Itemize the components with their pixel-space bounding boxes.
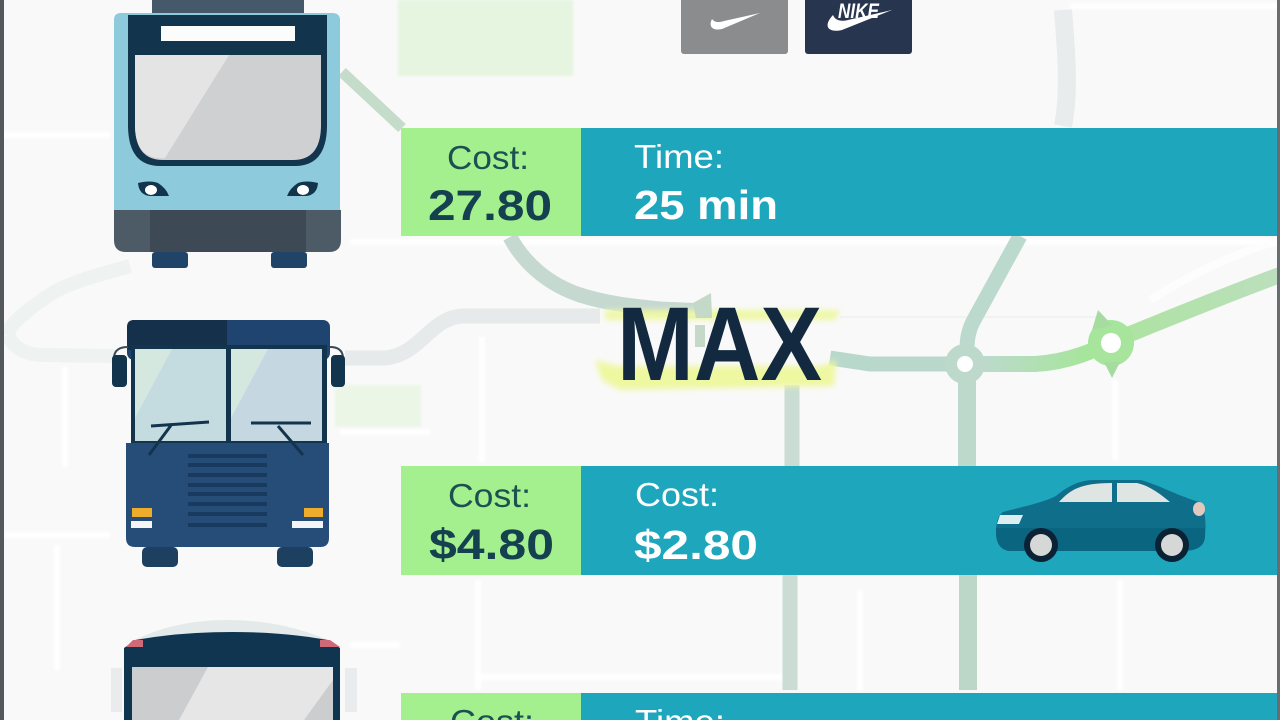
logo tile: navy swoosh: NIKE: [838, 0, 880, 23]
second cost panel: Cost:: [635, 476, 719, 513]
cost panel: $4.80: [429, 521, 554, 569]
right edge border: [1277, 0, 1280, 720]
logo tile: navy swoosh: [805, 0, 912, 54]
time panel: Time:: [634, 138, 724, 175]
icon: navy bus: [112, 320, 345, 567]
cost panel: Cost:: [448, 477, 531, 514]
cost panel: Cost:: [447, 139, 529, 176]
map patch: light green block top: [398, 0, 573, 76]
row 3: cost and time, cropped: [401, 693, 1280, 720]
row 1: cost and time: [401, 128, 1280, 236]
second cost panel: [581, 466, 1280, 575]
cost panel: [401, 693, 581, 720]
brand logos: [681, 0, 912, 54]
icon: light blue bus: [114, 0, 341, 268]
map roads: grey: [8, 10, 1280, 358]
logo tile: grey swoosh: [681, 0, 788, 54]
icon: car: [996, 480, 1205, 562]
left edge border: [0, 0, 4, 720]
cost panel: [401, 128, 581, 236]
time panel: 25 min: [634, 182, 778, 228]
cost panel: [401, 466, 581, 575]
map roads: green: [342, 72, 1280, 690]
row 2: cost and cost: [401, 466, 1280, 575]
second cost panel: $2.80: [634, 522, 758, 568]
map roundabouts: [945, 310, 1134, 384]
time panel: [581, 693, 1280, 720]
map patch: light green block middle: [335, 385, 421, 427]
time panel: [581, 128, 1280, 236]
title: MAX with highlight: MAX: [617, 286, 822, 403]
icon: lower bus: [111, 620, 357, 720]
cost panel: 27.80: [428, 182, 552, 230]
